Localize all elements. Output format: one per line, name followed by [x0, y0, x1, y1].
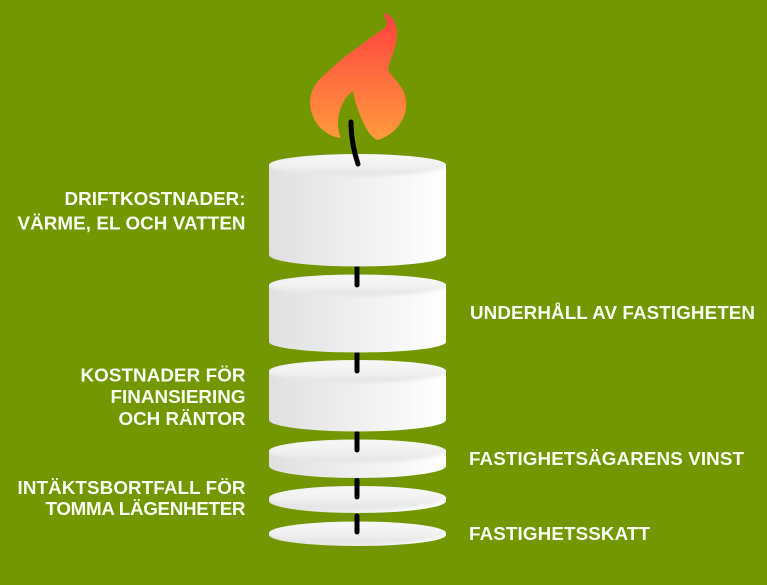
- wick segment 1: [351, 122, 358, 164]
- tier 5: tomma lägenheter: [268, 486, 448, 514]
- tier 6: fastighetsskatt: [268, 521, 448, 547]
- label: underhåll av fastigheten: UNDERHÅLL AV FASTIGHETEN: [470, 302, 755, 323]
- wick segment 2: [354, 267, 360, 285]
- tier 2: underhåll: [268, 274, 448, 353]
- wick segment 6: [354, 516, 360, 532]
- tier 4: fastighetsägarens vinst: [268, 439, 448, 479]
- wick segment 3: [354, 353, 360, 371]
- label: intäktsbortfall för tomma lägenheter: [18, 477, 246, 519]
- label: intäktsbortfall för tomma lägenheter: TOMMA LÄGENHETER: [46, 498, 246, 519]
- label: driftkostnader: DRIFTKOSTNADER:: [64, 188, 246, 209]
- label: kostnader för finansiering och räntor: [80, 364, 246, 429]
- label: värme, el och vatten: VÄRME, EL OCH VATTEN: [18, 212, 246, 234]
- tier 3: finansiering och räntor: [268, 359, 448, 432]
- label: kostnader för finansiering och räntor: FINANSIERING: [110, 386, 246, 407]
- label: fastighetsägarens vinst: FASTIGHETSÄGARENS VINST: [469, 448, 745, 469]
- wick segment 5: [354, 480, 360, 497]
- label: kostnader för finansiering och räntor: KOSTNADER FÖR: [80, 364, 246, 386]
- label: kostnader för finansiering och räntor: OCH RÄNTOR: [118, 408, 246, 429]
- wick segment 4: [354, 433, 360, 450]
- label: intäktsbortfall för tomma lägenheter: INTÄKTSBORTFALL FÖR: [18, 477, 246, 498]
- tier 1: driftkostnader: [268, 153, 448, 267]
- label: fastighetsskatt: FASTIGHETSSKATT: [469, 523, 651, 544]
- icon: flame: [310, 13, 406, 140]
